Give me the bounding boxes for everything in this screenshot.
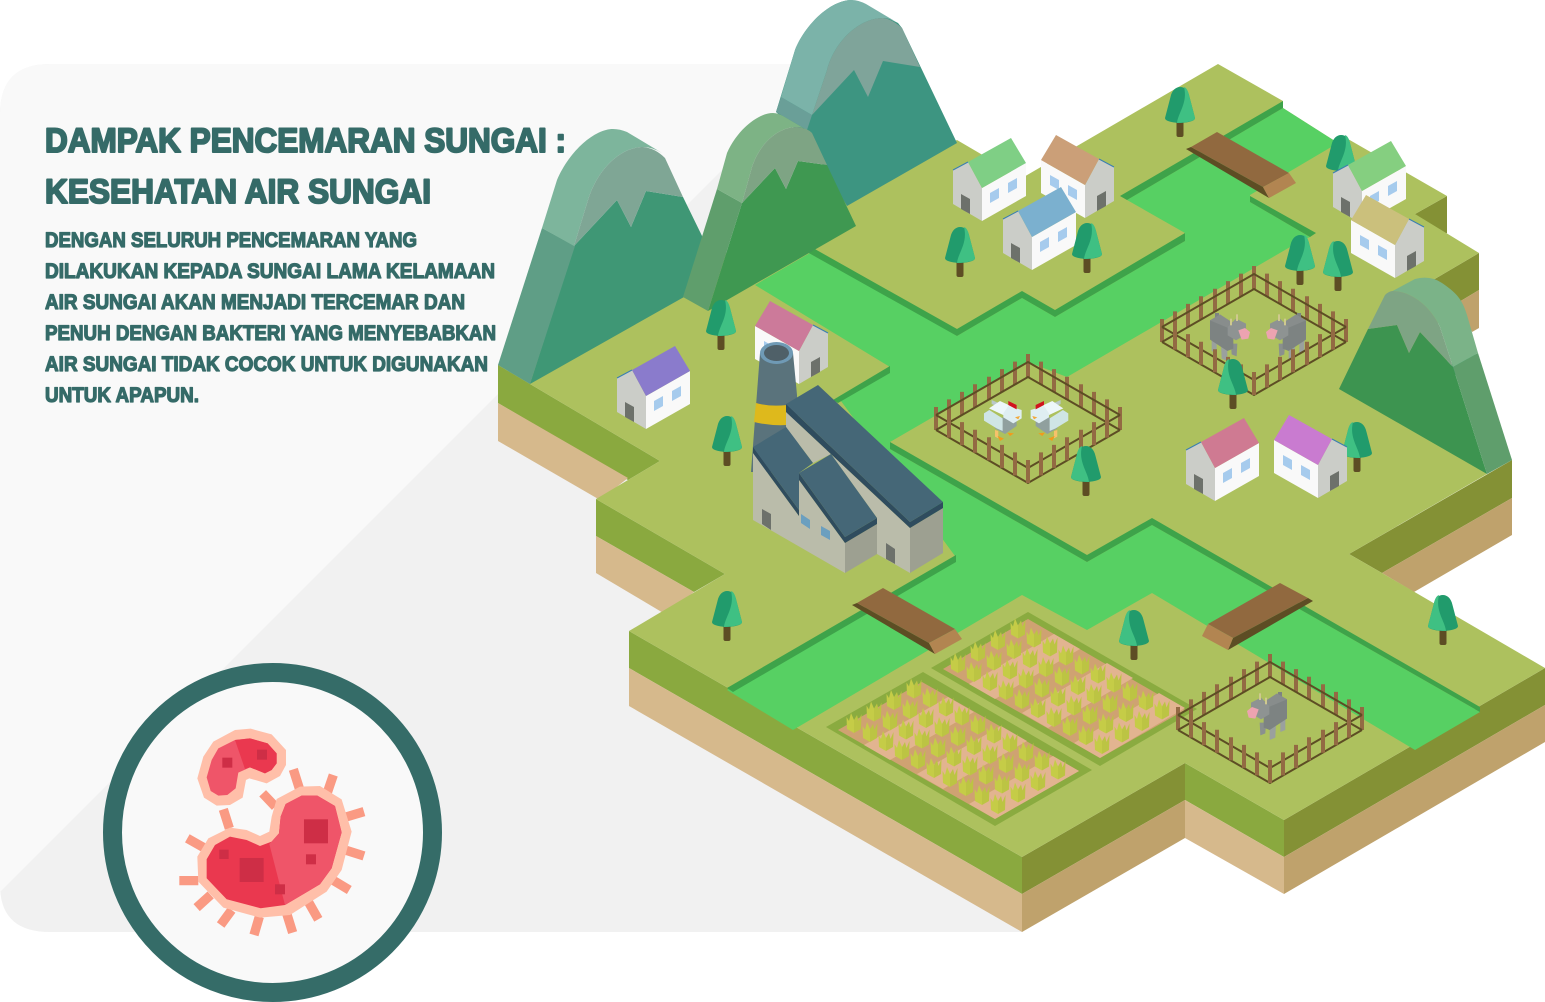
- tree east: [1428, 595, 1458, 645]
- tree behind right mountain: [1450, 340, 1480, 390]
- tree top: [1165, 87, 1195, 137]
- bridge: right: [1202, 583, 1313, 650]
- fence with cows: back: [1162, 266, 1346, 342]
- tree by purple house: [1342, 422, 1372, 472]
- body text: UNTUK APAPUN.: [45, 383, 199, 407]
- house green right: [1333, 141, 1406, 224]
- chicken left: [984, 400, 1022, 441]
- rice field lower: [826, 672, 1092, 826]
- bacteria badge: [112, 672, 432, 992]
- house green left: [953, 138, 1026, 221]
- cow right: [1266, 313, 1306, 361]
- bridge: left: [852, 588, 962, 654]
- cow lower: [1247, 692, 1287, 740]
- body text: AIR SUNGAI AKAN MENJADI TERCEMAR DAN: [45, 290, 465, 314]
- tree by fence: [1218, 359, 1248, 409]
- tree northwest: [706, 300, 736, 350]
- body text: DILAKUKAN KEPADA SUNGAI LAMA KELAMAAN: [45, 259, 495, 283]
- cow left: [1210, 313, 1250, 361]
- house blue: [1003, 187, 1076, 270]
- house pink upper: [755, 301, 828, 384]
- mountain: back: [776, 0, 957, 206]
- icon: bacteria: [179, 729, 364, 935]
- river: [727, 108, 1480, 750]
- title: DAMPAK PENCEMARAN SUNGAI :: [45, 122, 566, 160]
- tree south: [1119, 610, 1149, 660]
- house magenta: [1274, 415, 1347, 498]
- mountain: middle: [683, 113, 856, 311]
- bridge: top: [1186, 132, 1296, 198]
- mountain: left: [498, 129, 704, 384]
- terrain walls: [498, 196, 1545, 932]
- title: [45, 122, 566, 211]
- body text: AIR SUNGAI TIDAK COCOK UNTUK DIGUNAKAN: [45, 352, 488, 376]
- tree right b: [1323, 241, 1353, 291]
- fence lower: back: [1178, 654, 1362, 730]
- title: KESEHATAN AIR SUNGAI: [45, 173, 431, 211]
- mountain: right: [1339, 278, 1512, 474]
- chicken right: [1031, 400, 1068, 441]
- fence with chickens: back: [936, 354, 1120, 430]
- factory building: [753, 385, 943, 573]
- tree right a: [1285, 235, 1315, 285]
- body text: [45, 228, 496, 407]
- tree behind green house: [1326, 135, 1356, 185]
- house purple: [617, 346, 690, 429]
- fence with chickens: front: [936, 415, 1120, 483]
- tree near chickens: [1071, 446, 1101, 496]
- house pink lower: [1186, 418, 1259, 501]
- tree west: [712, 416, 742, 466]
- body text: DENGAN SELURUH PENCEMARAN YANG: [45, 228, 417, 252]
- crops upper: [950, 618, 1170, 754]
- rice field upper: [931, 612, 1197, 766]
- crops lower: [846, 678, 1066, 814]
- factory chimney: [751, 342, 800, 472]
- fence lower: front: [1178, 715, 1362, 783]
- land surface: [498, 64, 1545, 857]
- background panel: [0, 64, 1022, 932]
- house tan: [1041, 135, 1114, 218]
- house yellow: [1351, 195, 1424, 278]
- tree southwest: [712, 591, 742, 641]
- fence with cows: front: [1162, 327, 1346, 395]
- body text: PENUH DENGAN BAKTERI YANG MENYEBABKAN: [45, 321, 496, 345]
- tree village left: [945, 227, 975, 277]
- river banks: [727, 101, 1480, 712]
- tree village right: [1072, 223, 1102, 273]
